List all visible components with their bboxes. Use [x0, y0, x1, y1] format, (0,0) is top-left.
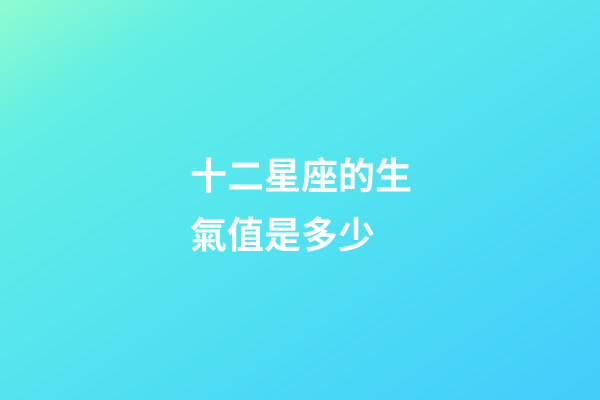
title — [190, 156, 412, 256]
title: 氣值是多少 — [190, 215, 375, 256]
title: 十二星座的生 — [190, 156, 412, 197]
